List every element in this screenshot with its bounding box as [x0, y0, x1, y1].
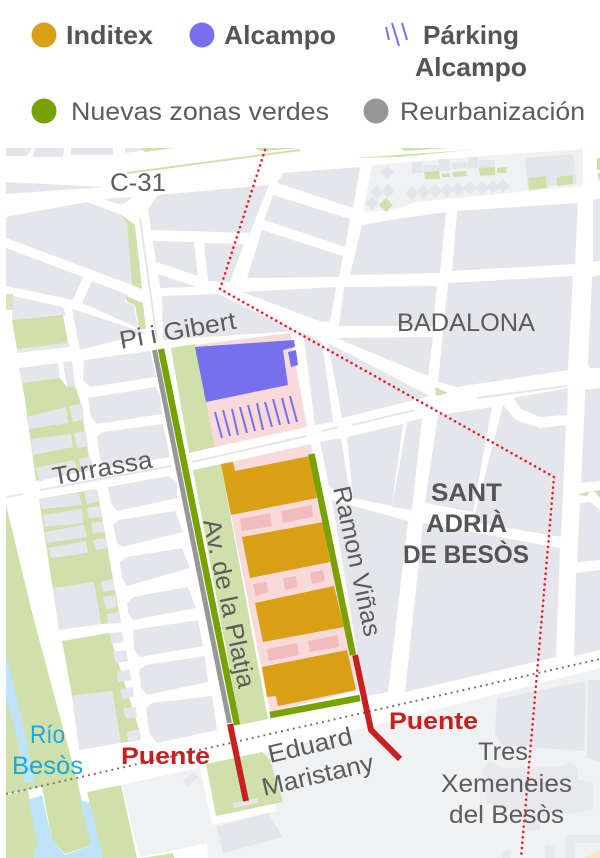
reurbanization line — [154, 350, 230, 723]
bridge right — [355, 655, 400, 759]
new green lines — [161, 349, 360, 725]
white streets over light ground — [138, 764, 276, 858]
Alcampo building — [195, 340, 298, 402]
label: Puente right: Puente — [389, 708, 478, 735]
label: Ramon Vinas: Ramon Viñas — [327, 483, 386, 639]
bridge left — [230, 724, 246, 801]
legend item: Reurbanizacion: Reurbanización — [400, 98, 585, 126]
label: Rio Besos — [12, 721, 83, 780]
legend item: Alcampo: Alcampo — [224, 20, 336, 50]
label: Pi i Gibert: Pi i Gibert — [117, 307, 238, 355]
Inditex plot — [221, 444, 358, 712]
legend item: Parking Alcampo: Alcampo — [415, 52, 527, 82]
Inditex pink ground — [221, 444, 358, 712]
label: Sant Adria de Besos: ADRIÀ — [426, 509, 507, 538]
legend item: Inditex: Inditex — [66, 20, 154, 50]
railway dotted line — [6, 659, 600, 794]
label: Torrassa: Torrassa — [50, 446, 155, 491]
building: Tres Xemeneies — [482, 762, 593, 832]
bottom right details — [585, 850, 600, 858]
light grey ground areas — [122, 148, 600, 858]
label: BADALONA: BADALONA — [397, 309, 535, 337]
label: C-31: C-31 — [110, 169, 166, 197]
legend item: Parking Alcampo — [386, 20, 527, 82]
label: Tres Xemeneies del Besos: del Besòs — [449, 801, 564, 829]
label: Rio Besos: Río — [30, 721, 65, 749]
Alcampo parking stripes — [215, 396, 297, 438]
label: Eduard Maristany — [259, 722, 377, 802]
label: Sant Adria de Besos — [403, 479, 529, 569]
label: Tres Xemeneies del Besos — [441, 738, 572, 829]
Inditex buildings — [221, 456, 356, 706]
municipal boundary dotted line — [220, 150, 554, 858]
label: Av. de la Platja: Av. de la Platja — [197, 516, 260, 691]
legend — [32, 20, 585, 126]
Alcampo pink ground — [195, 333, 307, 447]
river Besos — [6, 653, 103, 858]
legend item: Parking Alcampo: Párking — [423, 20, 519, 50]
legend item: Inditex — [32, 20, 154, 50]
Alcampo plot — [195, 333, 307, 447]
grey blocks on green column — [26, 404, 258, 808]
legend item: Nuevas zonas verdes: Nuevas zonas verdes — [71, 98, 329, 126]
street medians — [7, 218, 567, 497]
Inditex dark pink patches — [240, 505, 339, 661]
label: Tres Xemeneies del Besos: Tres — [478, 738, 528, 766]
label: Sant Adria de Besos: DE BESÒS — [403, 539, 529, 569]
label: Eduard Maristany: Maristany — [259, 749, 377, 802]
label: Rio Besos: Besòs — [12, 752, 83, 780]
label: Tres Xemeneies del Besos: Xemeneies — [441, 770, 572, 798]
label: Sant Adria de Besos: SANT — [431, 479, 502, 507]
label: Puente left: Puente — [121, 743, 210, 770]
label: Eduard Maristany: Eduard — [265, 722, 355, 769]
